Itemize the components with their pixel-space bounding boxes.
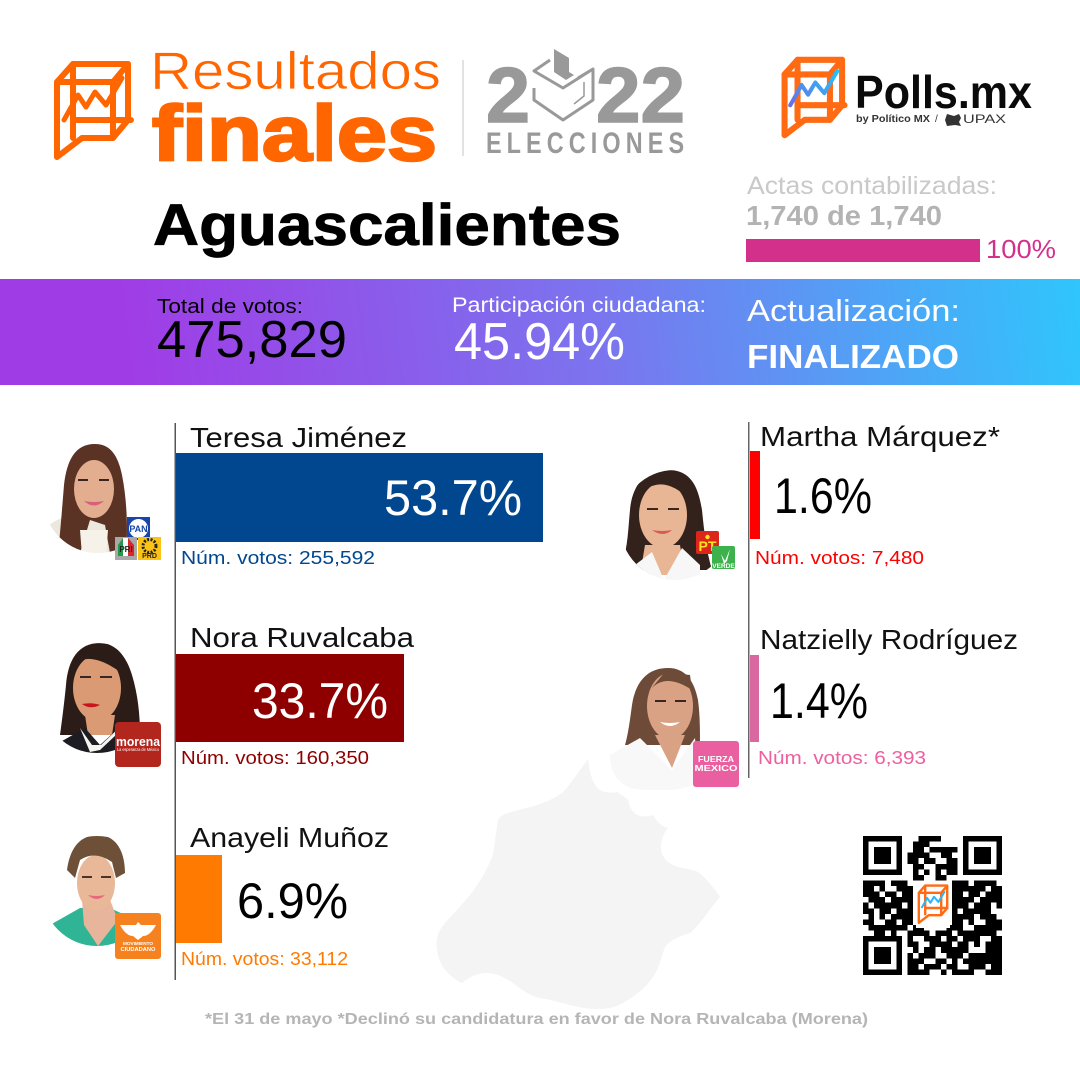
stat: participación ciudadana: 45.94% [454,313,625,371]
title: Resultados finales: Resultados [150,42,441,101]
icon: QR center logo [919,886,948,923]
bar [750,655,759,742]
logo: 2022 Elecciones [486,49,685,160]
badge: PT: PT [699,538,717,554]
logo: 2022 Elecciones: 2 [486,51,530,139]
QR code [863,836,1002,975]
candidate: Natzielly Rodríguez [610,624,1018,790]
name: Anayeli Muñoz [190,822,389,853]
badge: PAN: PAN [129,524,148,534]
stat: participación ciudadana [452,294,706,371]
portrait: Natzielly [625,668,700,768]
name: Natzielly Rodríguez [760,624,1018,655]
footnote: *El 31 de mayo *Declinó su candidatura en favor de Nora Ruvalcaba (Morena) [205,1011,868,1028]
chart axis right [748,422,750,778]
stat: total de votos: 475,829 [157,311,347,369]
percentage: 53.7% [384,470,522,526]
badge: PAN [127,517,150,540]
badge: PRD [138,537,161,560]
panel: actas contabilizadas [746,172,1056,264]
badge: PRI [115,537,137,560]
panel: stats band [0,279,1080,385]
votes: Núm. votos: 6,393 [758,748,926,768]
stat: participación ciudadana: Participación ciudadana: [452,294,706,317]
candidate: Nora Ruvalcaba [55,622,414,768]
icon: polls cube [785,60,845,135]
badge: PRI: PRI [119,545,133,554]
badge: Fuerza México: FUERZA [698,754,734,764]
candidate: Anayeli Muñoz [50,822,389,969]
bar [176,855,222,943]
candidate: Martha Márquez [626,426,1000,575]
votes: Núm. votos: 33,112 [181,949,348,969]
votes: Núm. votos: 255,592 [181,548,375,568]
badge: Verde: VERDE [712,563,735,570]
logo: Polls.mx: Polls.mx [855,66,1032,118]
name: Nora Ruvalcaba [190,622,414,653]
map: Aguascalientes silhouette [436,759,720,1009]
name: Teresa Jiménez [190,422,407,453]
percentage: 1.6% [774,468,872,524]
heading: Aguascalientes: Aguascalientes [153,193,621,258]
title: Resultados finales [150,42,441,177]
votes: Núm. votos: 160,350 [181,748,369,768]
panel: actas contabilizadas: 100% [986,234,1056,264]
percentage: 33.7% [252,673,388,729]
badge: Movimiento Ciudadano [115,913,161,959]
icon: upax mark [945,114,961,126]
name: Martha Márquez* [760,421,1000,452]
logo: Polls.mx: / [935,114,938,125]
badge: morena [115,722,161,767]
portrait: Martha [626,470,711,575]
votes: Núm. votos: 7,480 [755,548,924,568]
badge: Fuerza México [693,741,739,787]
portrait: Teresa [50,444,127,553]
logo: 2022 Elecciones: ELECCIONES [486,126,684,160]
logo icon: Resultados finales [57,64,131,157]
stat: actualización: FINALIZADO [747,338,959,375]
percentage: 6.9% [237,873,348,929]
chart axis left [174,423,176,980]
badge: PRD: PRD [142,553,157,560]
bar [176,453,543,542]
logo: 2022 Elecciones: 22 [596,51,685,139]
logo: Polls.mx: by Político MX [856,113,930,125]
icon: ballot box [534,49,593,120]
candidate: Teresa Jiménez [43,422,543,568]
stat: actualización [747,293,960,375]
badge: Fuerza México: MEXICO [694,763,738,773]
percentage: 1.4% [770,673,868,729]
badge: Movimiento Ciudadano: CIUDADANO [120,947,156,953]
title: Resultados finales: finales [152,89,437,177]
divider line [462,60,464,156]
badge: Movimiento Ciudadano: MOVIMIENTO [123,941,154,946]
stat: total de votos: Total de votos: [157,296,303,318]
badge: Verde [712,546,735,570]
bar [176,654,404,742]
logo: Polls.mx [785,60,1032,135]
badge: morena: morena [116,735,161,749]
panel: actas contabilizadas: 1,740 de 1,740 [746,200,942,231]
badge: PT [696,531,719,554]
progress bar [746,239,980,262]
stat: actualización: Actualización: [747,293,960,328]
panel: actas contabilizadas: Actas contabilizadas: [747,172,997,200]
badge: morena: La esperanza de México [117,747,159,752]
portrait: Anayeli [52,836,125,946]
logo: Polls.mx: UPAX [963,112,1006,126]
portrait: Nora [60,643,140,753]
bar [750,451,760,539]
